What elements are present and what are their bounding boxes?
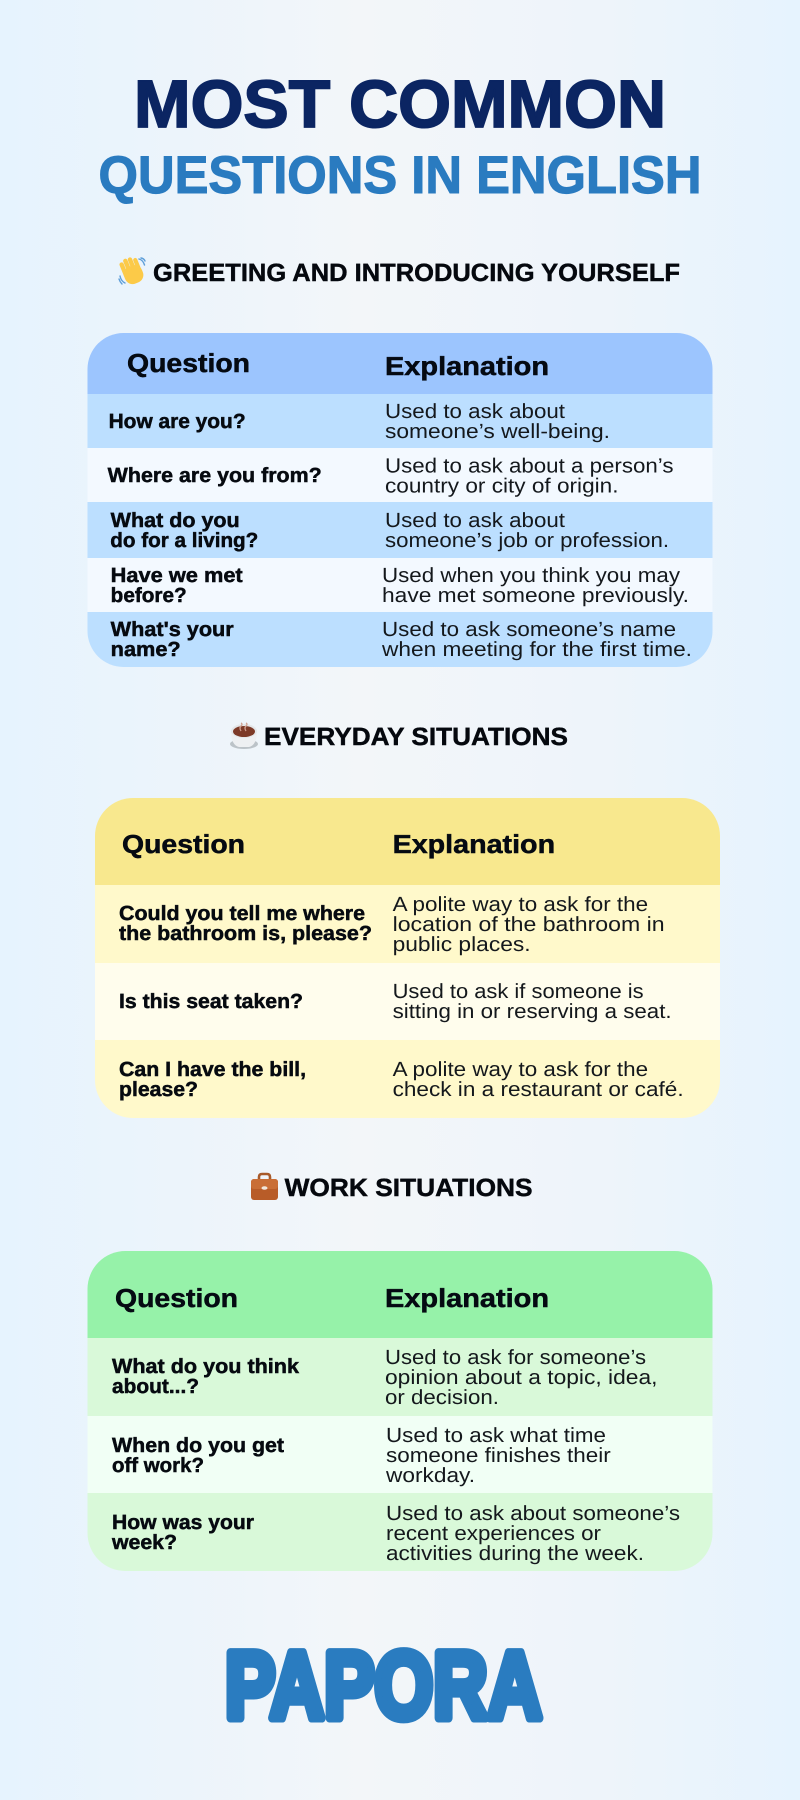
row: what do you think: What do you think <box>112 1355 300 1378</box>
row: what's your name: What's your <box>111 618 234 641</box>
row: bill: Can I have the bill, <box>119 1058 306 1081</box>
row: bathroom: A polite way to ask for the <box>393 893 648 916</box>
row: seat taken: Is this seat taken? <box>119 990 303 1013</box>
row: bathroom: location of the bathroom in <box>393 913 665 936</box>
row: off work: someone finishes their <box>386 1444 611 1467</box>
table header: Question <box>115 1283 238 1313</box>
icon: waving hand <box>118 254 146 286</box>
row: what do you think: about...? <box>112 1375 199 1398</box>
row: seat taken <box>119 980 672 1023</box>
row: where are you from: Where are you from? <box>108 464 322 487</box>
row: your week: recent experiences or <box>386 1522 601 1545</box>
row: have we met: have met someone previously. <box>382 584 689 607</box>
row: bill <box>119 1058 684 1101</box>
row: off work: When do you get <box>112 1434 284 1457</box>
title: MOST COMMON <box>134 67 666 142</box>
section heading: everyday: EVERYDAY SITUATIONS <box>264 723 568 751</box>
row: off work: workday. <box>385 1464 475 1487</box>
row: your week: Used to ask about someone’s <box>386 1502 680 1525</box>
table header <box>127 348 549 381</box>
table header: Explanation <box>393 829 555 859</box>
panel: everyday table <box>94 798 721 1118</box>
row: your week <box>111 1502 680 1565</box>
row: what do you do <box>110 509 669 552</box>
row: where are you from: Used to ask about a person’s <box>385 454 674 478</box>
table header: Explanation <box>385 1283 549 1313</box>
row: your week: week? <box>111 1531 177 1554</box>
title <box>98 67 702 205</box>
row: bathroom: public places. <box>393 933 531 956</box>
row: off work <box>112 1424 611 1487</box>
logo: PAPORA: PAPORA <box>225 1633 542 1739</box>
row: off work: off work? <box>112 1454 204 1477</box>
row: what do you do: Used to ask about <box>385 509 565 532</box>
row: seat taken: Used to ask if someone is <box>393 980 644 1003</box>
row: off work: Used to ask what time <box>386 1424 606 1447</box>
row: your week: activities during the week. <box>386 1542 644 1565</box>
row: where are you from: country or city of origin. <box>385 474 618 498</box>
row: what do you think: or decision. <box>385 1386 499 1409</box>
row: how are you: someone’s well-being. <box>385 420 610 443</box>
table header <box>115 1283 549 1313</box>
table header: Question <box>127 348 250 378</box>
row: bill: A polite way to ask for the <box>393 1058 648 1081</box>
row: your week: How was your <box>112 1511 254 1534</box>
row: what do you think: Used to ask for someone’s <box>385 1346 646 1369</box>
icon: briefcase <box>251 1174 278 1200</box>
section heading: greeting: GREETING AND INTRODUCING YOURSELF <box>153 259 680 287</box>
row: how are you <box>109 400 610 443</box>
row: what do you do: What do you <box>111 509 240 532</box>
row: have we met: Have we met <box>111 564 243 587</box>
row: bathroom: Could you tell me where <box>119 902 365 925</box>
row: bathroom <box>119 893 665 956</box>
row: have we met: before? <box>111 584 187 607</box>
table header: Question <box>122 829 245 859</box>
row: what do you think <box>112 1346 658 1409</box>
icon: hot beverage <box>230 723 258 749</box>
section heading: work: WORK SITUATIONS <box>285 1174 533 1202</box>
row: bathroom: the bathroom is, please? <box>119 922 372 945</box>
panel: work table <box>87 1251 713 1571</box>
row: seat taken: sitting in or reserving a seat. <box>393 1000 672 1023</box>
row: have we met <box>111 564 689 607</box>
row: what do you do: someone’s job or profession. <box>385 529 669 552</box>
row: have we met: Used when you think you may <box>382 564 681 587</box>
row: what's your name: name? <box>111 638 181 661</box>
row: how are you: How are you? <box>109 410 246 433</box>
title: QUESTIONS IN ENGLISH <box>98 146 702 205</box>
row: bill: please? <box>119 1078 198 1101</box>
row: what's your name <box>111 618 692 661</box>
row: what do you think: opinion about a topic, idea, <box>385 1366 658 1389</box>
row: what's your name: Used to ask someone’s name <box>382 618 676 641</box>
table header: Explanation <box>385 351 549 381</box>
row: bill: check in a restaurant or café. <box>393 1078 684 1101</box>
row: how are you: Used to ask about <box>385 400 565 423</box>
row: what do you do: do for a living? <box>110 529 258 552</box>
row: what's your name: when meeting for the first time. <box>381 638 692 661</box>
row: where are you from <box>108 454 673 498</box>
table header <box>122 829 555 859</box>
panel: greeting table <box>87 333 713 667</box>
